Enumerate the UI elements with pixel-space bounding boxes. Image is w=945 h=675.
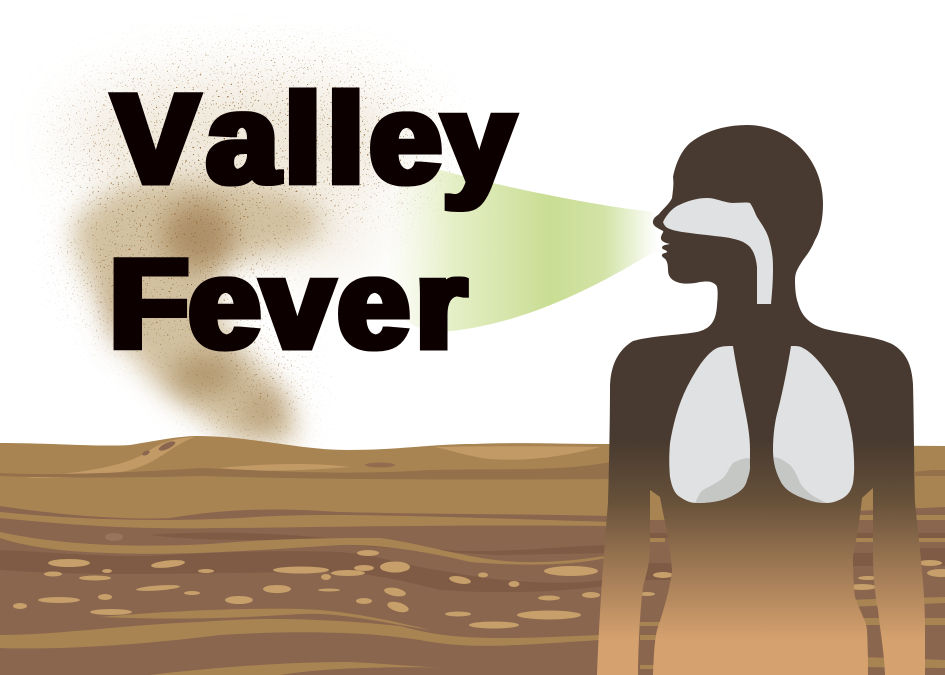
- title: [110, 68, 514, 376]
- right lung base: [774, 457, 827, 503]
- nasal airway: [663, 198, 773, 304]
- right lung: [773, 346, 854, 503]
- title line: Fever: Fever: [110, 233, 466, 376]
- left lung base: [695, 458, 750, 503]
- dust cloud: [30, 25, 510, 450]
- strata behind and right of person: [640, 533, 945, 580]
- ground: soil layers: [0, 436, 945, 675]
- left lung: [669, 346, 750, 503]
- darker spots: [142, 439, 395, 468]
- thin dark band: [0, 462, 610, 480]
- green air stream: [380, 170, 660, 331]
- title line: Valley: Valley: [113, 68, 514, 211]
- dust plume: [72, 178, 322, 442]
- pebbles: [13, 550, 600, 628]
- dust specks: [30, 25, 510, 450]
- light sand streaks: [25, 437, 600, 478]
- person silhouette: [597, 125, 925, 675]
- body: [597, 125, 925, 675]
- lower brown strata: [0, 506, 945, 675]
